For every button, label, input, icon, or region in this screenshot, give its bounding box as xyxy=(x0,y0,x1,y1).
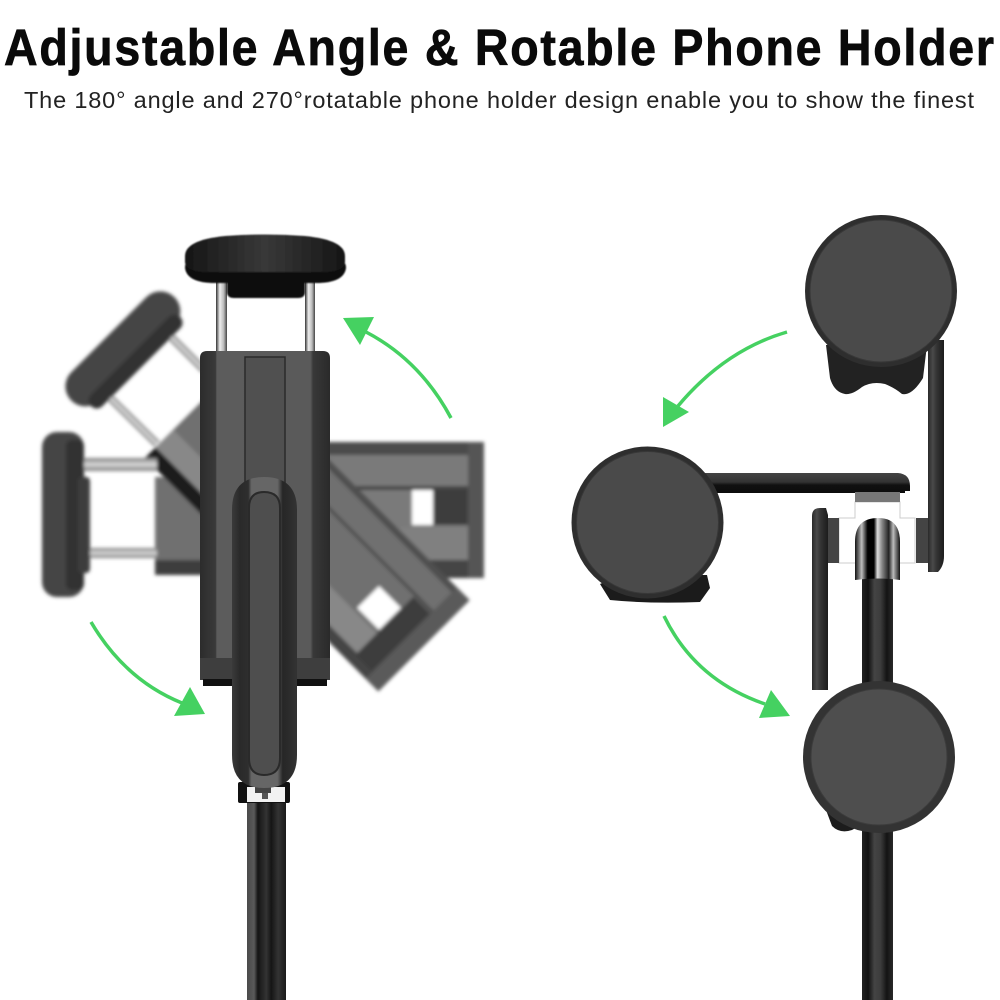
top disc xyxy=(185,234,346,298)
chrome joint xyxy=(855,518,900,580)
stem xyxy=(247,800,286,1000)
arrow: upper left product xyxy=(343,317,451,418)
top foot xyxy=(826,345,927,394)
arrow: lower left product xyxy=(91,622,205,716)
blurred rotated holders, left product xyxy=(42,283,484,691)
bracket pads xyxy=(828,518,928,563)
vertical bar right xyxy=(928,340,944,572)
right product xyxy=(572,215,957,1000)
stems xyxy=(862,578,893,1000)
left disc xyxy=(572,446,724,598)
horizontal holder ghost xyxy=(155,442,484,578)
pins xyxy=(216,276,315,352)
top disc xyxy=(805,215,957,367)
rods, left xyxy=(82,458,157,558)
diagonal holder ghost xyxy=(145,367,470,691)
bottom disc xyxy=(803,681,955,833)
left foot xyxy=(600,575,710,603)
handle xyxy=(232,477,297,788)
subtitle: The 180° angle and 270°rotatable phone holder design enable you to show the finest xyxy=(24,87,974,113)
hinge xyxy=(238,782,290,803)
disc, upper left xyxy=(57,283,193,419)
main holder, left product xyxy=(185,234,346,1000)
rods, upper left xyxy=(102,332,204,444)
horizontal arm xyxy=(705,473,910,502)
vertical bar lower xyxy=(812,508,828,690)
title: Adjustable Angle & Rotable Phone Holder xyxy=(4,20,994,77)
white bracket outline xyxy=(839,502,915,563)
bottom foot xyxy=(826,810,870,831)
disc, left xyxy=(42,432,90,597)
arrow: lower right product xyxy=(664,616,790,718)
arrow: upper right product xyxy=(663,332,787,427)
holder body xyxy=(200,351,330,686)
